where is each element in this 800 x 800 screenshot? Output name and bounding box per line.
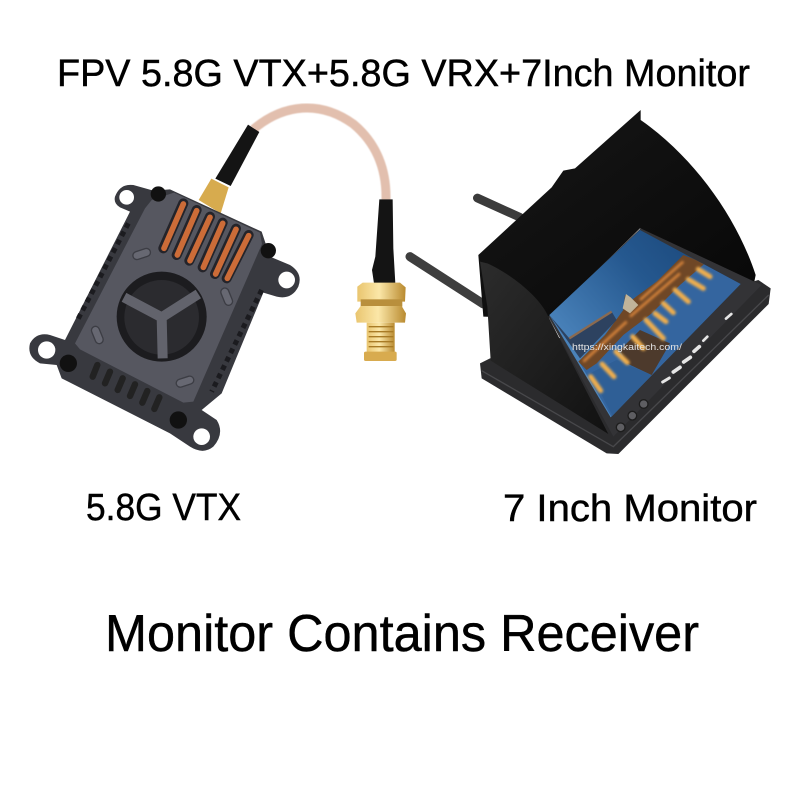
sma gold connector <box>355 283 406 361</box>
label: 5.8G VTX: 5.8G VTX <box>86 487 241 529</box>
vtx top cover <box>75 193 262 403</box>
cathedral <box>623 294 638 313</box>
water right <box>580 262 743 420</box>
fan <box>117 272 207 362</box>
infographic canvas <box>29 58 771 652</box>
heat shrink near sma <box>372 199 395 283</box>
white menu buttons <box>663 314 731 382</box>
street light reflections <box>591 269 710 391</box>
dark reflection <box>620 330 670 375</box>
mmcx gold connector <box>199 179 229 213</box>
side vents <box>77 223 262 392</box>
rf cable <box>253 108 386 200</box>
screen <box>547 227 747 423</box>
vtx base plate with mounting ears <box>29 185 300 451</box>
heat shrink near vtx <box>215 125 259 186</box>
product: 5.8G VTX with antenna cable <box>29 108 406 451</box>
city lights <box>583 262 683 362</box>
antennas <box>410 198 520 304</box>
copper coil slots <box>163 203 249 278</box>
city skyline <box>578 255 705 370</box>
sunshade left side panel <box>480 262 608 434</box>
round buttons <box>616 400 648 432</box>
bridge <box>549 312 617 358</box>
product: 7 inch monitor with sunshade <box>410 110 771 454</box>
bottom vents <box>93 365 159 409</box>
mounting holes <box>38 190 295 445</box>
sunshade back and top <box>478 110 756 318</box>
oval recesses <box>90 247 234 388</box>
lower water <box>592 360 652 415</box>
base plate edge highlight <box>482 295 769 447</box>
watermark url: https://xingkaitech.com/ <box>572 342 683 352</box>
monitor bezel <box>548 228 762 437</box>
label: 7 Inch Monitor: 7 Inch Monitor <box>503 488 757 530</box>
screws <box>60 186 276 429</box>
base plate <box>480 280 771 454</box>
caption: monitor contains receiver: Monitor Contains Receiver <box>105 605 699 663</box>
title: FPV 5.8G VTX+5.8G VRX+7Inch Monitor <box>57 53 750 95</box>
